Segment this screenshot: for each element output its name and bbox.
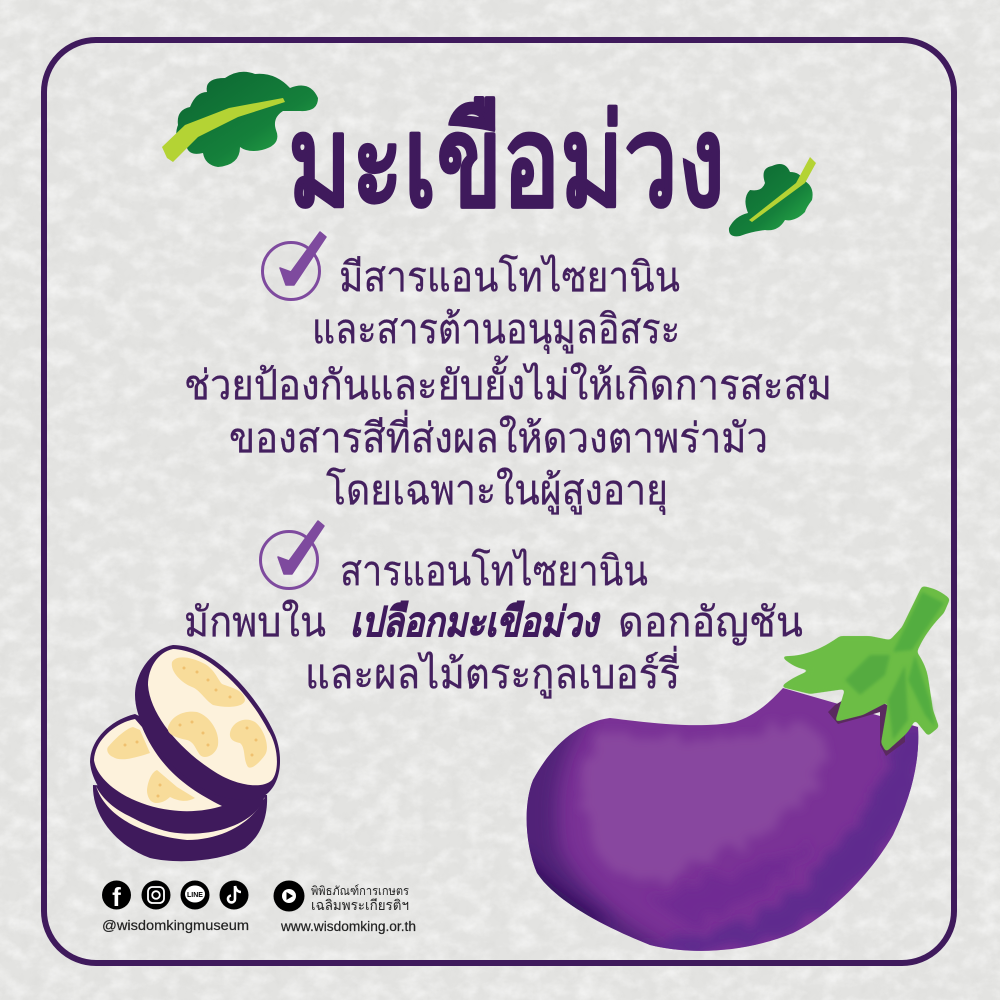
text block: first fact: ช่วยป้องกันและยับยั้งไม่ให้เกิดการสะสม — [184, 355, 832, 408]
icon: tiktok — [220, 880, 248, 910]
bottom slice — [93, 785, 267, 861]
middle slice seeds — [107, 727, 150, 759]
website: www.wisdomking.or.th — [280, 919, 416, 934]
middle slice rim — [90, 714, 264, 834]
text block: first fact: โดยเฉพาะในผู้สูงอายุ — [326, 467, 668, 515]
icon: check mark two — [260, 521, 324, 588]
icon: small leaf — [729, 157, 816, 236]
text block: first fact — [184, 254, 832, 515]
text block: second fact: ดอกอัญชัน — [618, 599, 803, 645]
text block: second fact: มักพบใน — [184, 599, 326, 645]
eggplant body — [526, 688, 918, 951]
text block: first fact: มีสารแอนโทไซยานิน — [339, 254, 680, 300]
icon: facebook — [102, 880, 131, 912]
top slice seeds — [172, 657, 245, 707]
icon: facebook: f — [112, 882, 121, 912]
illustration: whole eggplant — [500, 586, 950, 960]
cream crescent — [96, 786, 265, 840]
top slice face — [148, 649, 277, 785]
text block: second fact: สารแอนโทไซยานิน — [340, 548, 648, 594]
text block: first fact: ของสารสีที่ส่งผลให้ดวงตาพร่ามัว — [229, 410, 768, 461]
social icons — [102, 880, 248, 912]
calyx shadow — [828, 690, 905, 756]
text block: first fact: และสารต้านอนุมูลอิสระ — [312, 306, 680, 354]
stem and calyx — [781, 586, 950, 752]
icon: line — [180, 880, 210, 910]
middle slice face — [94, 719, 222, 811]
illustration: eggplant slices — [90, 645, 280, 861]
social handle: @wisdomkingmuseum — [102, 918, 249, 933]
museum name: เฉลิมพระเกียรติฯ — [311, 897, 409, 913]
text block: second fact: และผลไม้ตระกูลเบอร์รี่ — [305, 646, 680, 699]
top slice rim — [135, 645, 280, 800]
icon: large leaf — [162, 72, 318, 167]
title: มะเขือม่วง — [288, 91, 725, 234]
icon: instagram — [142, 880, 170, 910]
icon: play logo — [274, 880, 304, 912]
icon: line: LINE — [187, 892, 203, 899]
museum name — [311, 884, 410, 913]
text block: second fact — [184, 548, 803, 699]
icon: check mark one — [262, 232, 326, 300]
museum name: พิพิธภัณฑ์การเกษตร — [311, 884, 410, 898]
text block: second fact: เปลือกมะเขือม่วง — [350, 599, 600, 645]
